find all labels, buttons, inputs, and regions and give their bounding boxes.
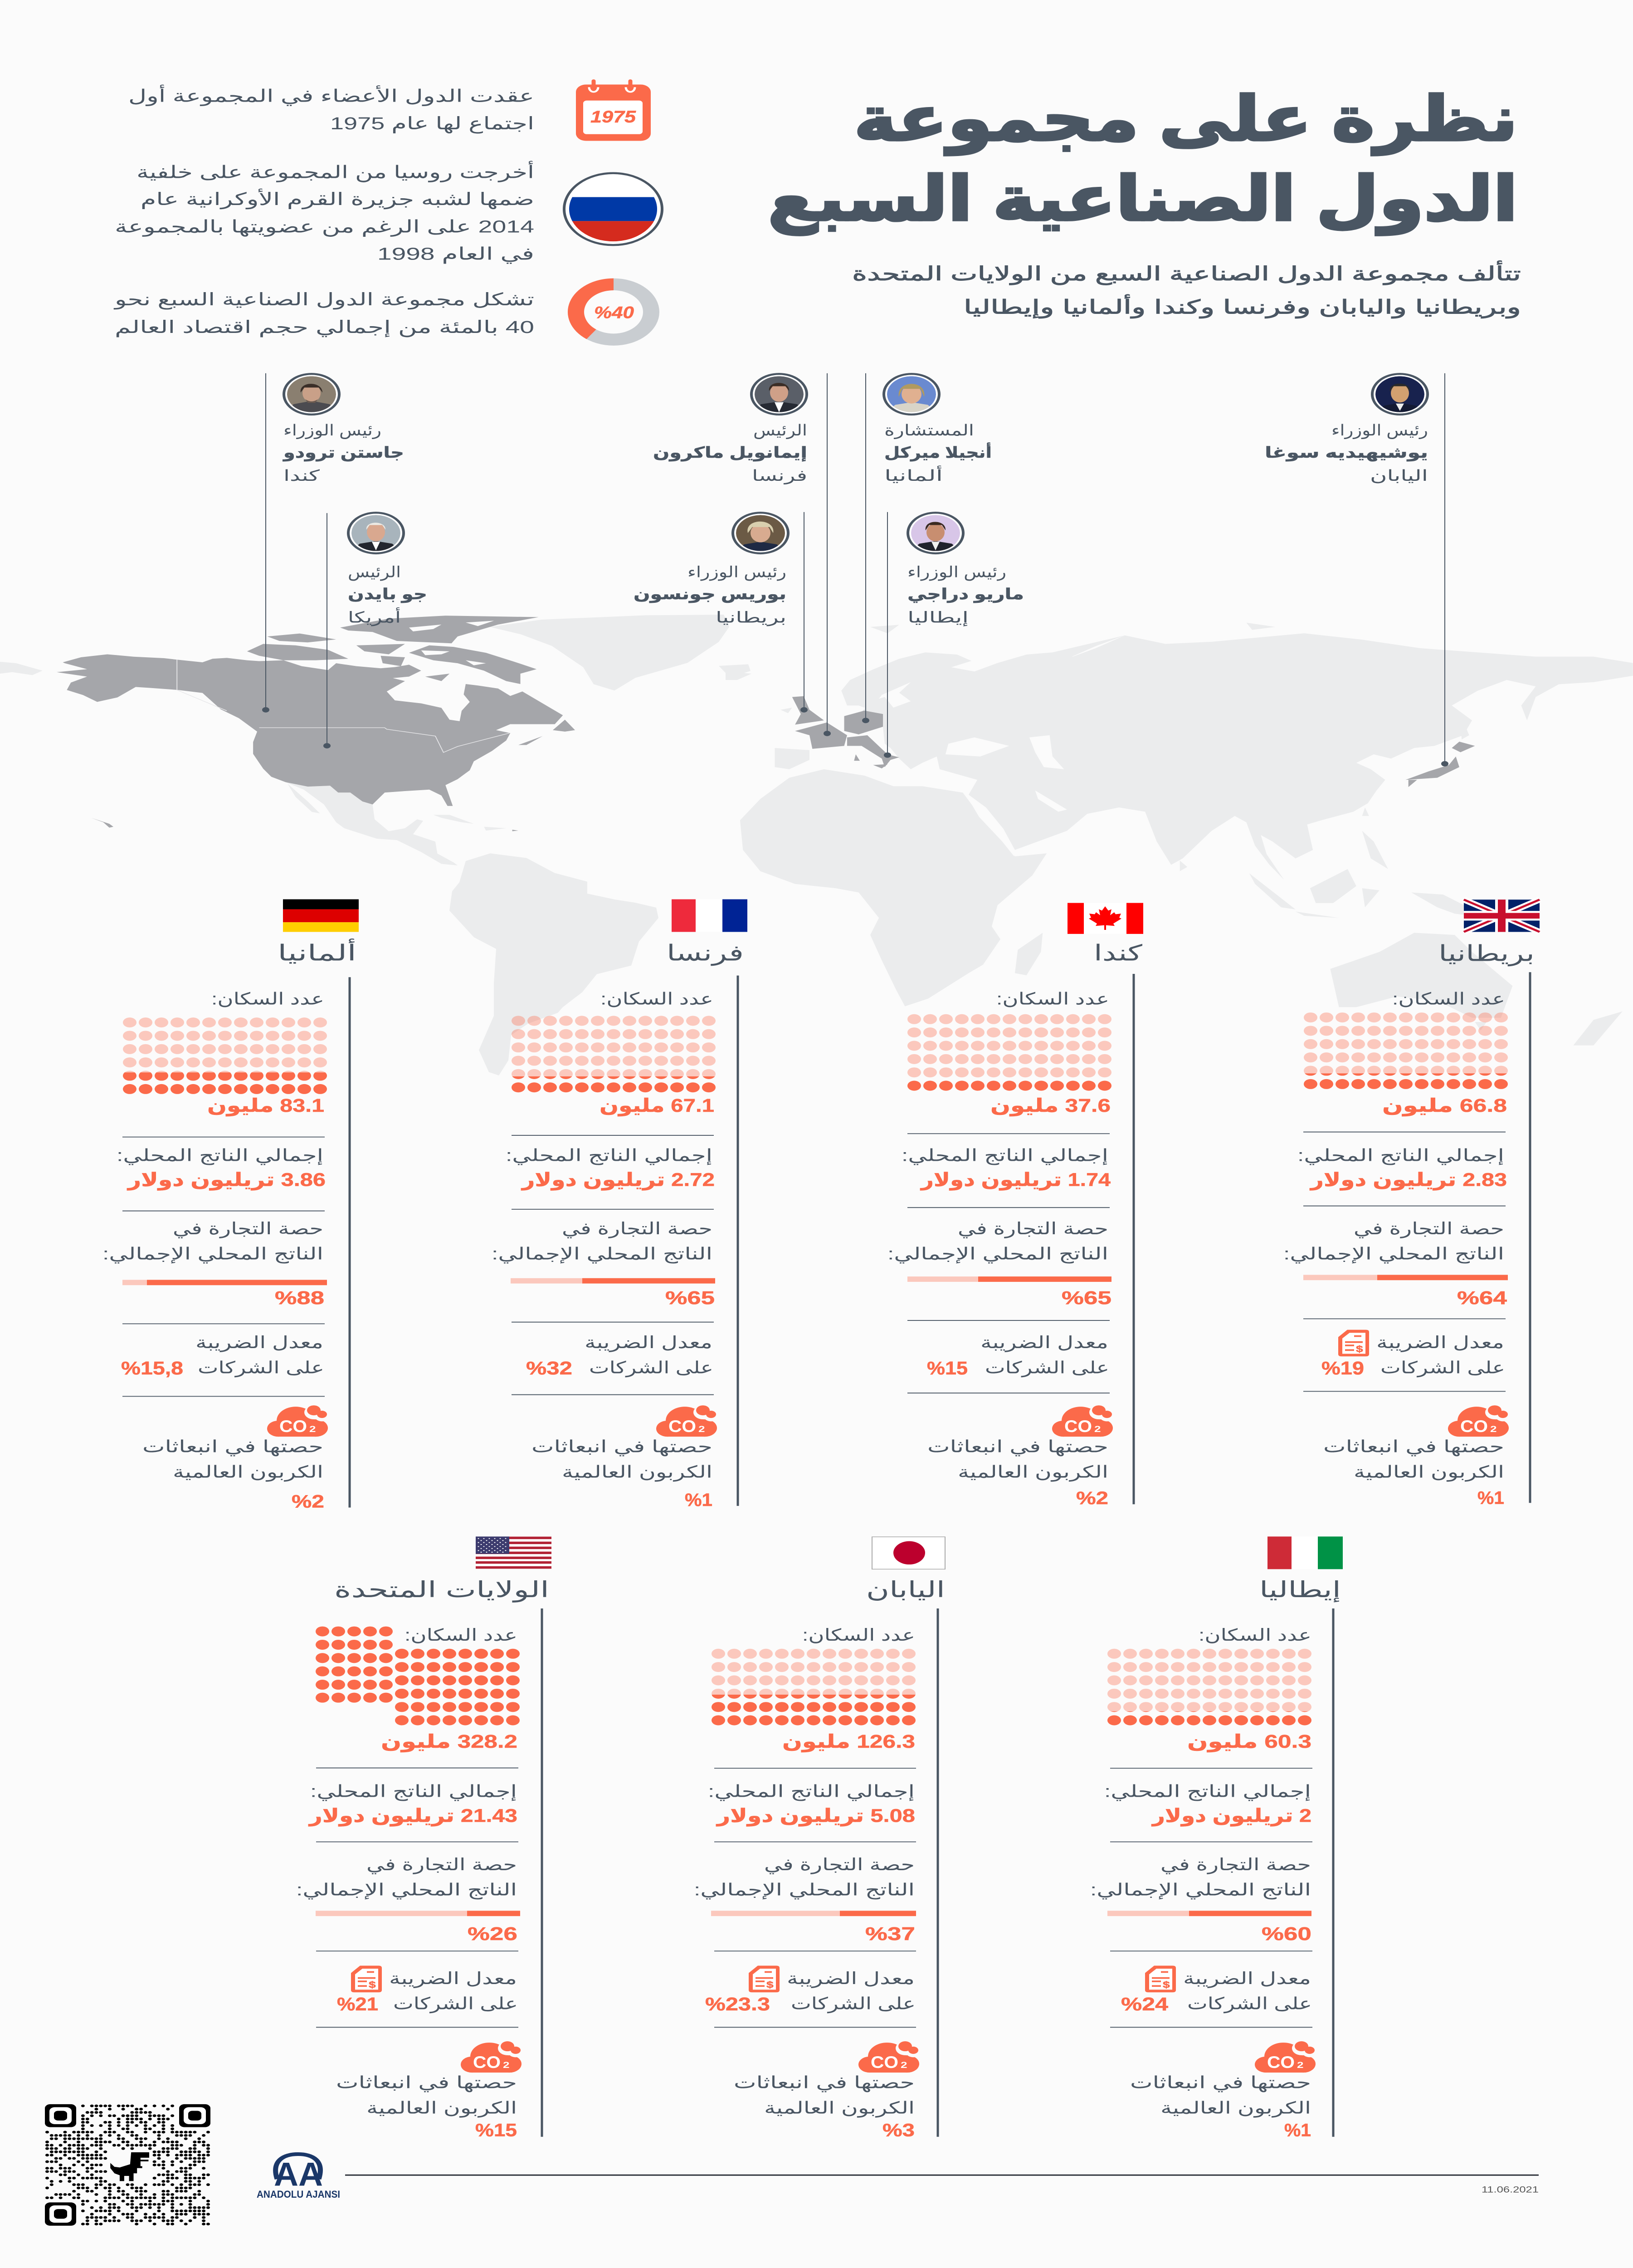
text: share of world economy: [114, 290, 534, 337]
trade label: حصة التجارة في: [764, 1855, 915, 1874]
GDP value: 1.74 تريليون دولار: [920, 1170, 1111, 1191]
leader: Biden, USA: [323, 513, 427, 748]
country name: اليابان: [866, 1578, 945, 1602]
emissions value: %1: [1477, 1488, 1504, 1508]
flag: Italy: [1267, 1536, 1343, 1569]
trade share bar: [122, 1280, 327, 1285]
leader: Johnson, UK: رئيس الوزراء: [687, 563, 786, 581]
icon: CO2 cloud: 2: [309, 1424, 316, 1434]
emissions label: حصتها في انبعاثات: [336, 2073, 517, 2092]
leader: Johnson, UK: بريطانيا: [716, 609, 786, 626]
icon: Russian flag: [562, 173, 664, 245]
GDP label: إجمالي الناتج المحلي:: [902, 1146, 1108, 1165]
leader: Merkel, Germany: ألمانيا: [884, 465, 943, 484]
trade share bar: [711, 1911, 916, 1916]
tax label: [389, 1969, 518, 2014]
emissions value: %1: [1284, 2120, 1311, 2141]
emissions label: حصتها في انبعاثات: [531, 1437, 712, 1457]
tax label: على الشركات: [393, 1994, 518, 2014]
emissions label: الكربون العالمية: [958, 1463, 1108, 1482]
trade label: حصة التجارة في: [1354, 1219, 1504, 1238]
leader: Trudeau, Canada: جاستن ترودو: [283, 444, 404, 462]
tax label: [980, 1333, 1109, 1378]
population label: عدد السكان:: [996, 990, 1109, 1008]
trade share bar: [1107, 1911, 1311, 1916]
population dots: [914, 1019, 1105, 1086]
emissions value: %2: [1076, 1488, 1108, 1508]
trade label: [1283, 1219, 1504, 1264]
GDP value: 3.86 تريليون دولار: [127, 1170, 326, 1191]
text: share of world economy: 40 بالمئة من إجمالي حجم اقتصاد العالم: [115, 318, 534, 337]
flag: Canada: [1068, 903, 1143, 934]
icon: CO2 cloud: 2: [698, 1424, 705, 1434]
population dots: [1114, 1654, 1305, 1721]
population value: 60.3 مليون: [1187, 1731, 1311, 1752]
icon: CO2 cloud: 2: [1490, 1424, 1497, 1434]
trade value: %37: [865, 1924, 915, 1944]
leader: Suga, Japan: يوشيهيديه سوغا: [1265, 444, 1428, 462]
icon: tax document: [749, 1966, 780, 1992]
emissions label: [531, 1437, 712, 1482]
icon: CO2 cloud: CO: [1460, 1417, 1488, 1436]
GDP label: إجمالي الناتج المحلي:: [1104, 1782, 1311, 1801]
tax label: معدل الضريبة: [980, 1333, 1108, 1352]
icon: tax document: [1145, 1966, 1176, 1992]
text: Russia expelled: في العام 1998: [377, 244, 534, 264]
world map: [0, 615, 1633, 1075]
emissions label: حصتها في انبعاثات: [1323, 1437, 1504, 1457]
intro text: [852, 260, 1521, 318]
logo: Anadolu Ajansi: ANADOLU AJANSI: [257, 2189, 340, 2200]
emissions label: [1323, 1437, 1504, 1482]
trade share bar: [907, 1276, 1111, 1282]
leader: Draghi, Italy: [884, 512, 1024, 758]
emissions label: [336, 2073, 517, 2118]
flag: Japan: [872, 1537, 945, 1569]
icon: CO2 cloud: [461, 2041, 523, 2072]
emissions label: الكربون العالمية: [173, 1463, 323, 1482]
leader: Trudeau, Canada: [262, 373, 404, 713]
trade share bar: [511, 1278, 715, 1284]
icon: CO2 cloud: 2: [1094, 1424, 1101, 1434]
leader: Draghi, Italy: رئيس الوزراء: [907, 563, 1006, 581]
GDP value: 2.83 تريليون دولار: [1309, 1170, 1507, 1191]
icon: 40 percent donut: [576, 284, 651, 340]
title: الدول الصناعية السبع: [768, 165, 1518, 235]
icon: CO2 cloud: [1255, 2041, 1317, 2072]
QR code: [45, 2104, 210, 2226]
GDP label: إجمالي الناتج المحلي:: [117, 1146, 323, 1165]
population dots: [718, 1654, 909, 1721]
population dots: [518, 1021, 709, 1087]
icon: tax document: $: [369, 1980, 376, 1990]
trade share bar: [316, 1911, 520, 1916]
leader: Trudeau, Canada: كندا: [283, 467, 320, 484]
trade label: [102, 1219, 323, 1264]
text: Russia expelled: ضمها لشبه جزيرة القرم الأوكرانية عام: [141, 188, 534, 210]
emissions label: الكربون العالمية: [366, 2099, 517, 2118]
population label: عدد السكان:: [1199, 1626, 1311, 1645]
icon: tax document: $: [1163, 1980, 1170, 1990]
panel: Italy: [1090, 1536, 1343, 2141]
icon: CO2 cloud: CO: [1064, 1417, 1092, 1436]
icon: CO2 cloud: [858, 2041, 921, 2072]
emissions label: حصتها في انبعاثات: [927, 1437, 1108, 1457]
tax label: على الشركات: [1187, 1994, 1312, 2014]
leader: Merkel, Germany: أنجيلا ميركل: [884, 443, 992, 462]
trade label: حصة التجارة في: [1160, 1855, 1311, 1874]
emissions label: [1130, 2073, 1311, 2118]
flag: USA: [476, 1536, 551, 1569]
population dots: [130, 1022, 321, 1089]
trade label: الناتج المحلي الإجمالي:: [1090, 1881, 1311, 1900]
trade value: %26: [468, 1924, 517, 1944]
tax label: [1376, 1333, 1505, 1378]
leader: Draghi, Italy: ماريو دراجي: [907, 585, 1024, 603]
logo: Anadolu Ajansi: AA: [274, 2156, 323, 2193]
trade label: الناتج المحلي الإجمالي:: [296, 1881, 517, 1900]
icon: CO2 cloud: CO: [473, 2053, 501, 2072]
population value: 83.1 مليون: [207, 1095, 324, 1116]
icon: CO2 cloud: 2: [1297, 2060, 1303, 2070]
trade label: الناتج المحلي الإجمالي:: [1283, 1245, 1504, 1264]
icon: tax document: [1338, 1330, 1369, 1356]
GDP label: إجمالي الناتج المحلي:: [310, 1782, 517, 1801]
emissions label: الكربون العالمية: [1354, 1463, 1504, 1482]
emissions label: الكربون العالمية: [562, 1463, 712, 1482]
tax label: معدل الضريبة: [389, 1969, 517, 1988]
icon: CO2 cloud: [656, 1405, 719, 1437]
trade label: [296, 1855, 517, 1900]
emissions value: %2: [292, 1491, 324, 1512]
population value: 328.2 مليون: [381, 1731, 517, 1752]
leader: Macron, France: فرنسا: [752, 467, 807, 484]
trade label: الناتج المحلي الإجمالي:: [694, 1881, 915, 1900]
tax label: [195, 1333, 324, 1378]
flag: Germany: [283, 899, 359, 932]
tax value: %24: [1121, 1994, 1169, 2014]
tax label: معدل الضريبة: [1183, 1969, 1311, 1988]
title: [768, 85, 1518, 235]
emissions label: الكربون العالمية: [764, 2099, 915, 2118]
icon: CO2 cloud: CO: [1267, 2053, 1295, 2072]
leader: Macron, France: الرئيس: [753, 421, 807, 439]
tax value: %15: [927, 1358, 968, 1378]
trade share bar: [1303, 1275, 1508, 1280]
tax label: معدل الضريبة: [585, 1333, 712, 1352]
panel: Germany: [102, 899, 359, 1512]
intro text: وبريطانيا واليابان وفرنسا وكندا وألمانيا وإيطاليا: [964, 294, 1521, 318]
leader: Johnson, UK: [634, 512, 808, 713]
emissions label: الكربون العالمية: [1160, 2099, 1311, 2118]
tax value: %23.3: [705, 1994, 770, 2014]
GDP value: 21.43 تريليون دولار: [308, 1805, 517, 1827]
emissions label: [142, 1437, 323, 1482]
icon: CO2 cloud: 2: [901, 2060, 907, 2070]
tax value: %15,8: [121, 1358, 183, 1378]
panel: Canada: [887, 903, 1143, 1508]
icon: tax document: $: [766, 1980, 774, 1990]
leader: Macron, France: [653, 373, 831, 736]
leader: Biden, USA: جو بايدن: [348, 585, 427, 603]
panel: France: [492, 899, 747, 1510]
icon: tax document: $: [1356, 1344, 1363, 1354]
country name: فرنسا: [667, 941, 744, 966]
tax label: على الشركات: [589, 1359, 713, 1378]
country name: إيطاليا: [1259, 1578, 1341, 1603]
GDP value: 2.72 تريليون دولار: [521, 1170, 715, 1191]
trade value: %88: [275, 1288, 324, 1308]
date: 11.06.2021: [1482, 2185, 1539, 2195]
GDP value: 5.08 تريليون دولار: [716, 1805, 915, 1827]
icon: CO2 cloud: [267, 1405, 330, 1437]
text: Russia expelled: [115, 161, 534, 264]
panel: United States: [296, 1536, 551, 2141]
icon: CO2 cloud: 2: [503, 2060, 509, 2070]
tax label: معدل الضريبة: [787, 1969, 915, 1988]
leader: Biden, USA: الرئيس: [348, 563, 401, 581]
population dots: [322, 1632, 513, 1721]
leader: Suga, Japan: رئيس الوزراء: [1331, 421, 1428, 439]
icon: CO2 cloud: CO: [871, 2053, 898, 2072]
tax label: على الشركات: [985, 1359, 1109, 1378]
population label: عدد السكان:: [1392, 990, 1505, 1008]
icon: CO2 cloud: CO: [279, 1417, 307, 1436]
tax label: على الشركات: [791, 1994, 916, 2014]
trade label: حصة التجارة في: [173, 1219, 323, 1238]
tax value: %32: [526, 1358, 572, 1378]
text: first meeting: اجتماع لها عام 1975: [330, 113, 534, 133]
trade value: %65: [665, 1288, 715, 1308]
country name: الولايات المتحدة: [334, 1578, 549, 1603]
trade label: الناتج المحلي الإجمالي:: [102, 1245, 323, 1264]
population value: 126.3 مليون: [782, 1731, 915, 1752]
country name: بريطانيا: [1438, 942, 1535, 967]
icon: CO2 cloud: CO: [668, 1417, 696, 1436]
leader: Trudeau, Canada: رئيس الوزراء: [283, 421, 381, 439]
trade value: %65: [1062, 1288, 1111, 1308]
leader: Biden, USA: أمريكا: [348, 607, 401, 626]
icon: tax document: [351, 1966, 382, 1992]
logo: Anadolu Ajansi: [257, 2154, 340, 2200]
emissions value: %3: [882, 2120, 915, 2141]
text: first meeting: [128, 84, 534, 133]
text: share of world economy: تشكل مجموعة الدول الصناعية السبع نحو: [114, 290, 534, 310]
title: نظرة على مجموعة: [854, 85, 1518, 155]
leader: Macron, France: إيمانويل ماكرون: [653, 444, 807, 462]
emissions label: حصتها في انبعاثات: [1130, 2073, 1311, 2092]
emissions value: %15: [475, 2120, 517, 2141]
GDP label: إجمالي الناتج المحلي:: [1297, 1146, 1504, 1165]
trade value: %64: [1457, 1288, 1507, 1308]
population dots: [1311, 1017, 1501, 1084]
population value: 66.8 مليون: [1382, 1095, 1507, 1116]
country name: ألمانيا: [278, 938, 356, 965]
icon: calendar 1975: [576, 81, 651, 141]
tax label: [585, 1333, 713, 1378]
text: Russia expelled: أخرجت روسيا من المجموعة على خلفية: [136, 161, 534, 183]
GDP label: إجمالي الناتج المحلي:: [506, 1146, 712, 1165]
population label: عدد السكان:: [211, 990, 324, 1008]
trade label: حصة التجارة في: [562, 1219, 712, 1238]
icon: CO2 cloud: [1052, 1405, 1115, 1437]
population value: 67.1 مليون: [600, 1095, 714, 1116]
leader: Merkel, Germany: [862, 373, 992, 723]
trade label: [492, 1219, 712, 1264]
emissions value: %1: [685, 1490, 712, 1510]
flag: France: [672, 899, 747, 932]
emissions label: حصتها في انبعاثات: [142, 1437, 323, 1457]
leader: Suga, Japan: اليابان: [1370, 467, 1428, 484]
trade value: %60: [1262, 1924, 1311, 1944]
tax label: [787, 1969, 916, 2014]
tax value: %21: [337, 1994, 378, 2014]
text: Russia expelled: 2014 على الرغم من عضويتها بالمجموعة: [115, 217, 534, 237]
emissions label: [734, 2073, 915, 2118]
population label: عدد السكان:: [405, 1626, 517, 1645]
population label: عدد السكان:: [600, 990, 713, 1008]
tax label: معدل الضريبة: [1376, 1333, 1504, 1352]
trade label: حصة التجارة في: [958, 1219, 1108, 1238]
emissions label: [927, 1437, 1108, 1482]
trade label: [694, 1855, 915, 1900]
trade label: الناتج المحلي الإجمالي:: [887, 1245, 1108, 1264]
text: first meeting: عقدت الدول الأعضاء في المجموعة أول: [128, 84, 534, 107]
tax label: [1183, 1969, 1312, 2014]
panel: Japan: [694, 1537, 945, 2141]
tax label: معدل الضريبة: [195, 1333, 323, 1352]
population label: عدد السكان:: [802, 1626, 915, 1645]
trade label: [1090, 1855, 1311, 1900]
trade label: الناتج المحلي الإجمالي:: [492, 1245, 712, 1264]
emissions label: حصتها في انبعاثات: [734, 2073, 915, 2092]
icon: CO2 cloud: [1448, 1405, 1511, 1437]
tax value: %19: [1321, 1358, 1364, 1378]
trade label: [887, 1219, 1108, 1264]
intro text: تتألف مجموعة الدول الصناعية السبع من الولايات المتحدة: [852, 260, 1521, 285]
leader: Suga, Japan: [1265, 373, 1448, 767]
GDP label: إجمالي الناتج المحلي:: [708, 1782, 915, 1801]
tax label: على الشركات: [1380, 1359, 1505, 1378]
flag: UK: [1464, 899, 1540, 932]
population value: 37.6 مليون: [990, 1095, 1111, 1116]
tax label: على الشركات: [198, 1359, 324, 1378]
panel: United Kingdom: [1283, 899, 1540, 1508]
trade label: حصة التجارة في: [366, 1855, 517, 1874]
leader: Merkel, Germany: المستشارة: [884, 421, 974, 439]
country name: كندا: [1094, 941, 1143, 965]
icon: calendar 1975: 1975: [590, 108, 636, 126]
GDP value: 2 تريليون دولار: [1151, 1805, 1311, 1827]
leader: Draghi, Italy: إيطاليا: [907, 609, 969, 626]
icon: 40 percent donut: %40: [594, 303, 634, 322]
leader: Johnson, UK: بوريس جونسون: [634, 585, 786, 603]
